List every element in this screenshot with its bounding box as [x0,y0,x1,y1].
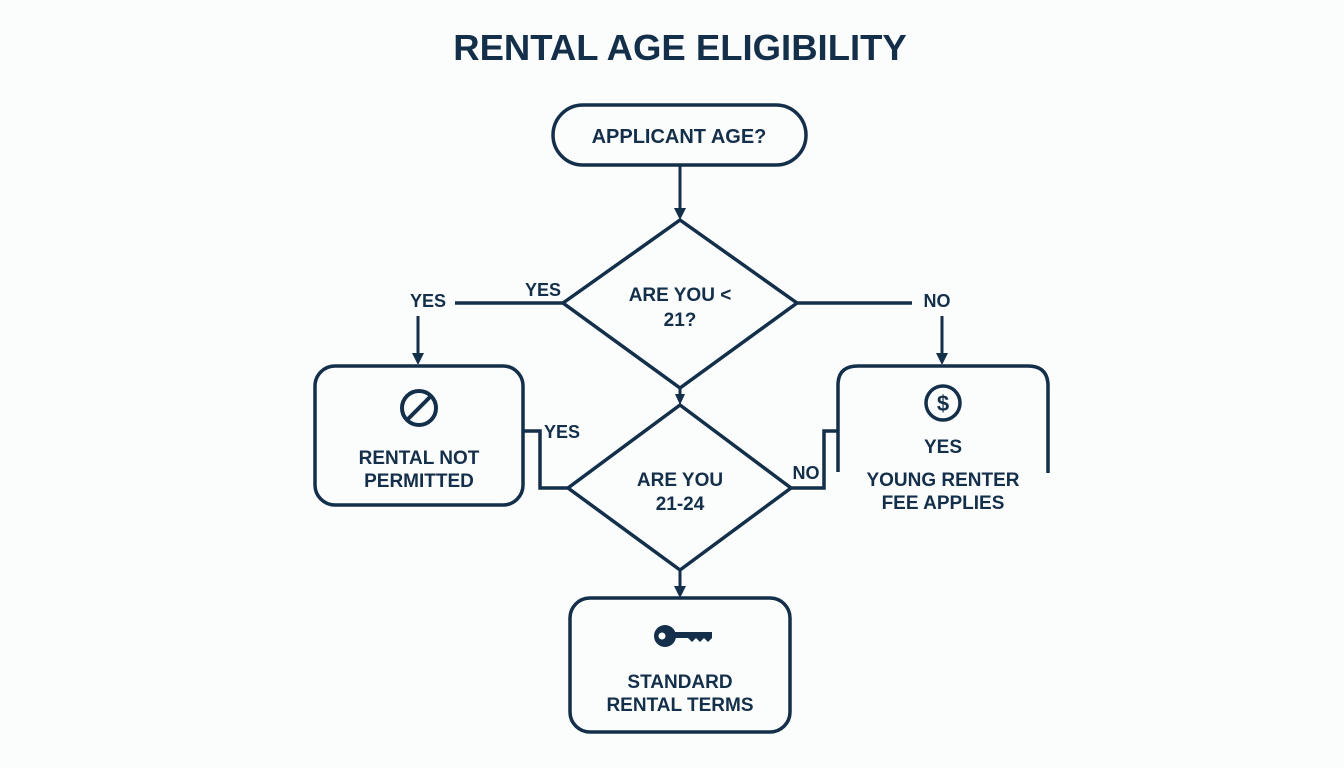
connector: yes to left panel [523,422,580,488]
diamond: are you 21-24: 21-24 [656,494,705,515]
connector: no right: NO [924,291,950,311]
start box: applicant age [553,105,806,165]
start box: applicant age: APPLICANT AGE? [592,126,766,148]
panel: rental not permitted [315,366,523,505]
icon: dollar: $ [937,391,949,416]
arrow: diamond 2 to standard terms [674,570,686,598]
diamond: are you under 21: ARE YOU < [629,285,731,306]
connector: yes left: YES [525,280,561,300]
diamond: are you 21-24 [568,405,791,570]
diamond: are you under 21: 21? [664,310,696,331]
diamond: are you 21-24: ARE YOU [637,470,723,491]
connector: no to right panel [791,431,838,488]
panel: young renter fee: FEE APPLIES [882,493,1004,514]
icon: key [654,625,712,647]
connector: yes left: YES [410,291,446,311]
panel: standard rental terms: RENTAL TERMS [606,695,754,716]
connector: yes to left panel: YES [544,422,580,442]
arrow: diamond 1 to diamond 2 [675,388,685,405]
panel: rental not permitted: RENTAL NOT [359,448,480,469]
icon: prohibition [402,391,436,425]
panel: young renter fee [838,366,1048,514]
panel: rental not permitted: PERMITTED [364,471,474,492]
diamond: are you under 21 [563,220,797,388]
icon: dollar [926,386,960,420]
arrow: start to diamond 1 [674,165,686,220]
panel: young renter fee: YOUNG RENTER [866,470,1020,491]
connector: no right [797,291,950,365]
title: RENTAL AGE ELIGIBILITY [453,27,907,68]
panel: standard rental terms: STANDARD [627,672,733,693]
connector: yes left [410,280,563,365]
panel: young renter fee: YES [924,437,962,458]
connector: no to right panel: NO [792,463,820,483]
panel: standard rental terms [570,598,790,732]
